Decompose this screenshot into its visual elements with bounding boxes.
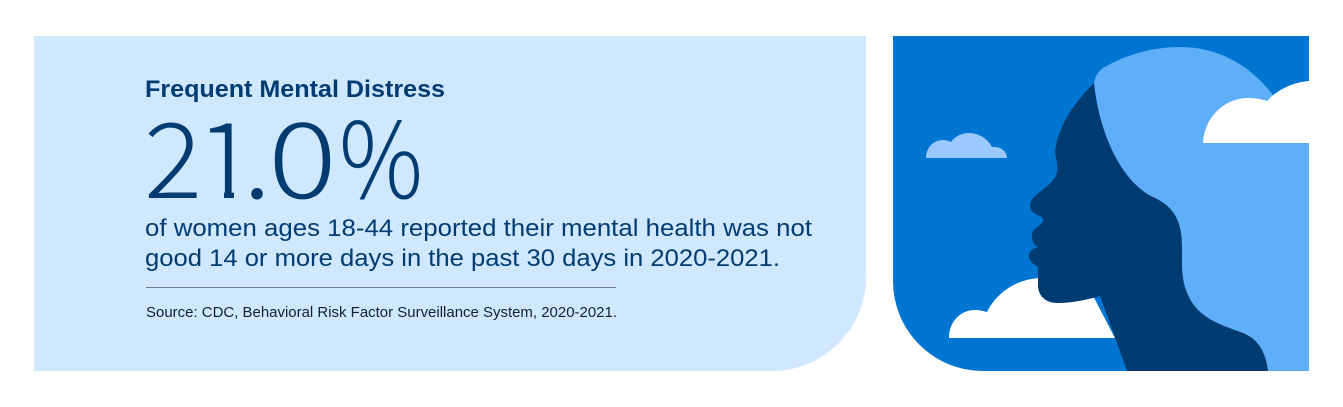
big number: . bbox=[243, 77, 271, 229]
bottom cloud bbox=[949, 278, 1115, 338]
panel background bbox=[34, 36, 866, 371]
illustration background bbox=[893, 36, 1309, 371]
big number: % bbox=[339, 77, 423, 229]
description: of women ages 18-44 reported their mental health was not bbox=[145, 215, 812, 242]
face silhouette bbox=[1029, 83, 1268, 371]
hair bbox=[1094, 47, 1309, 371]
infographic canvas bbox=[34, 36, 1309, 371]
big number: 0 bbox=[268, 77, 337, 229]
description: good 14 or more days in the past 30 days in 2020-2021. bbox=[145, 245, 780, 272]
divider bbox=[146, 287, 616, 288]
big number: 2 bbox=[144, 77, 202, 229]
big number bbox=[148, 120, 419, 200]
top right cloud bbox=[1203, 81, 1309, 143]
big number: 1 bbox=[195, 77, 257, 229]
panel: illustration bbox=[893, 36, 1309, 371]
small cloud bbox=[926, 133, 1007, 158]
description bbox=[145, 215, 812, 272]
heading: Frequent Mental Distress bbox=[145, 76, 445, 103]
panel: statistic bbox=[34, 36, 866, 371]
source: Source: CDC, Behavioral Risk Factor Surveillance System, 2020-2021. bbox=[146, 305, 617, 321]
